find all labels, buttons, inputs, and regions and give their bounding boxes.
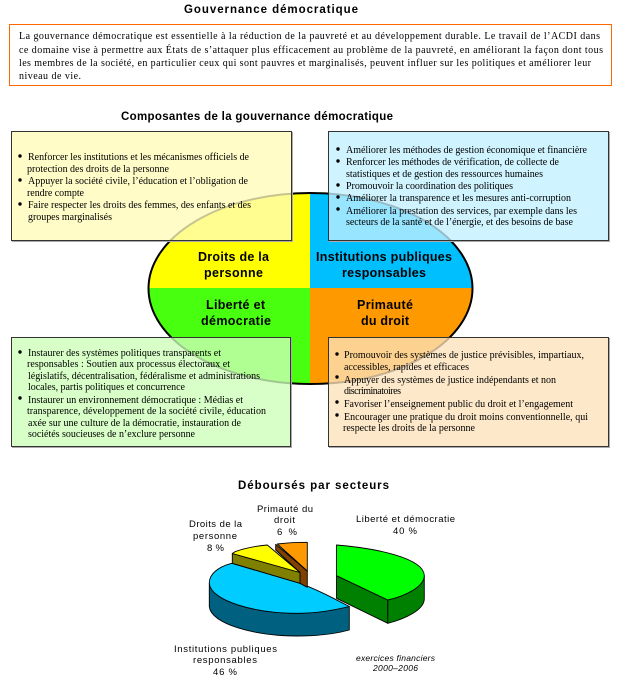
label: primauté du droit: du droit	[361, 314, 410, 328]
slice: primauté du droit 6%	[276, 542, 307, 587]
panel: primauté du droit: Appuyer des systèmes de justice indépendants et non	[344, 375, 556, 386]
intro text box: ce domaine vise à permettre aux États de s’attaquer plus efficacement au problème de la pauvreté, en améliorant la façon dont tous	[19, 44, 603, 56]
panel: institutions publiques responsables: Renforcer les méthodes de vérification, de collecte de	[346, 157, 560, 168]
label: institutions publiques 46 %	[174, 644, 277, 678]
ellipse outline	[148, 193, 472, 384]
heading: déboursés par secteurs: Déboursés par secteurs	[238, 480, 389, 492]
intro text box: les membres de la société, en particulier ceux qui sont pauvres et marginalisés, peuvent influer sur les politiques et améliorer leur	[19, 58, 592, 69]
quadrant: primauté du droit	[310, 288, 472, 384]
label: primauté du droit: Primauté	[357, 298, 413, 312]
panel: institutions publiques responsables	[328, 132, 610, 242]
panel: primauté du droit: Encourager une pratique du droit moins conventionnelle, qui	[344, 412, 588, 423]
label: institutions publiques responsables: responsables	[342, 266, 426, 280]
panel: primauté du droit: Favoriser l’enseignement public du droit et l’engagement	[344, 399, 573, 410]
label: institutions publiques 46 %: Institutions publiques	[174, 644, 277, 655]
label: droits de la personne 8 %: personne	[193, 531, 237, 542]
panel: liberté et démocratie: sociétés soucieuses de n’exclure personne	[28, 429, 196, 440]
panel: liberté et démocratie	[12, 338, 292, 448]
label: droits de la personne	[198, 250, 270, 280]
label: institutions publiques responsables: Institutions publiques	[316, 250, 452, 264]
label: droits de la personne 8 %	[189, 519, 243, 554]
label: liberté et démocratie: Liberté et	[206, 298, 266, 312]
panel: institutions publiques responsables: Améliorer la transparence et les mesures anti-corruption	[346, 193, 571, 204]
panel: liberté et démocratie: axée sur une culture de la démocratie, instauration de	[28, 418, 242, 429]
label: institutions publiques 46 %: 46 %	[213, 667, 238, 678]
label: primauté du droit 6 %: 6 %	[277, 527, 298, 538]
note: exercices financiers: 2000–2006	[372, 663, 418, 673]
label: primauté du droit	[357, 298, 413, 328]
label: institutions publiques responsables	[316, 250, 452, 280]
intro text box: niveau de vie.	[19, 71, 81, 82]
panel: liberté et démocratie: législatifs, décentralisation, fédéralisme et administrations	[28, 371, 260, 382]
slice: liberté et démocratie 40%	[336, 545, 424, 623]
slice: institutions publiques 46%	[209, 563, 349, 636]
label: institutions publiques 46 %: responsables	[193, 655, 257, 666]
panel: primauté du droit: accessibles, rapides et efficaces	[344, 362, 469, 373]
quadrant: droits de la personne	[148, 193, 310, 288]
panel: institutions publiques responsables: secteurs de la santé et de l’énergie, et des besoins de base	[346, 217, 574, 228]
quadrant: institutions publiques	[310, 193, 472, 288]
panel: droits de la personne: rendre compte	[27, 188, 85, 199]
label: droits de la personne: personne	[204, 266, 263, 280]
intro text box: La gouvernance démocratique est essentielle à la réduction de la pauvreté et au développement durable. Le travail de l’ACDI dans	[19, 31, 600, 42]
slice: droits de la personne 8%	[232, 545, 300, 583]
label: primauté du droit 6 %: droit	[274, 515, 295, 526]
panel: liberté et démocratie: locales, partis politiques et concurrence	[28, 382, 186, 393]
label: liberté et démocratie 40 %: Liberté et démocratie	[356, 514, 455, 525]
panel: institutions publiques responsables: Améliorer les méthodes de gestion économique et financière	[346, 145, 588, 156]
panel: liberté et démocratie: responsables : Soutien aux processus électoraux et	[27, 359, 230, 370]
panel: liberté et démocratie: Instaurer des systèmes politiques transparents et	[28, 348, 221, 359]
label: droits de la personne: Droits de la	[198, 250, 270, 264]
panel: droits de la personne: Faire respecter les droits des femmes, des enfants et des	[28, 200, 251, 211]
heading: composantes: Composantes de la gouvernance démocratique	[121, 111, 393, 123]
pie chart	[209, 542, 424, 636]
panel: primauté du droit	[328, 338, 610, 448]
panel: primauté du droit: Promouvoir des systèmes de justice prévisibles, impartiaux,	[344, 350, 584, 361]
label: liberté et démocratie 40 %	[356, 514, 455, 537]
title: Gouvernance démocratique	[184, 4, 358, 16]
ellipse diagram	[148, 193, 472, 384]
label: primauté du droit 6 %: Primauté du	[257, 504, 313, 515]
panel: primauté du droit: respecte les droits de la personne	[343, 423, 476, 434]
intro text box	[10, 24, 612, 86]
panel: droits de la personne: protection des droits de la personne	[27, 164, 170, 175]
label: liberté et démocratie: démocratie	[201, 314, 271, 328]
panel: institutions publiques responsables: statistiques et de gestion des ressources humaines	[346, 169, 543, 180]
note: exercices financiers	[356, 653, 436, 673]
panel: liberté et démocratie: Instaurer un environnement démocratique : Médias et	[28, 395, 243, 406]
panel: liberté et démocratie: transparence, développement de la société civile, éducation	[27, 406, 266, 417]
panel: droits de la personne: groupes marginalisés	[28, 212, 112, 223]
label: droits de la personne 8 %: Droits de la	[189, 519, 243, 530]
panel: primauté du droit: discriminatoires	[344, 386, 401, 397]
label: liberté et démocratie 40 %: 40 %	[393, 526, 418, 537]
panel: droits de la personne: Renforcer les institutions et les mécanismes officiels de	[28, 152, 250, 163]
label: liberté et démocratie	[201, 298, 271, 328]
label: primauté du droit 6 %	[257, 504, 313, 538]
panel: institutions publiques responsables: Améliorer la prestation des services, par exemple dans les	[346, 206, 577, 217]
panel: institutions publiques responsables: Promouvoir la coordination des politiques	[346, 181, 513, 192]
note: exercices financiers: exercices financiers	[356, 653, 436, 663]
panel: droits de la personne	[12, 132, 292, 242]
label: droits de la personne 8 %: 8 %	[207, 543, 225, 554]
panel: droits de la personne: Appuyer la société civile, l’éducation et l’obligation de	[28, 176, 249, 187]
quadrant: liberté et démocratie	[148, 288, 310, 384]
